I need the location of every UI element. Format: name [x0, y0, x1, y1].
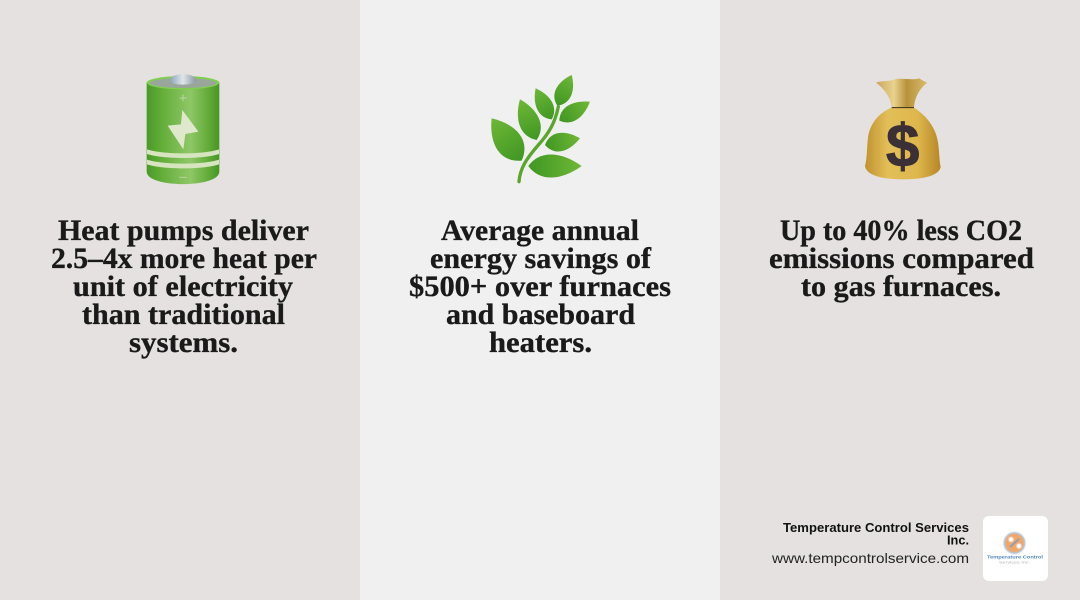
heading: savings — [409, 214, 671, 359]
heading: savings: $500+ over furnaces — [409, 270, 671, 303]
icon: money bag: $ — [886, 112, 919, 179]
heading: efficiency: 2.5–4x more heat per — [51, 242, 317, 275]
heading: efficiency: than traditional — [82, 298, 285, 331]
logo card: Temperature Control — [987, 554, 1043, 560]
icon: green leaves — [481, 71, 594, 182]
icon: money bag — [865, 78, 941, 179]
logo card: Services Inc. — [999, 560, 1030, 564]
heading: emissions — [769, 214, 1034, 303]
heading: savings: energy savings of — [430, 242, 652, 275]
logo card — [983, 516, 1048, 581]
website: www.tempcontrolservice.com — [771, 550, 969, 566]
heading: efficiency: systems. — [129, 326, 238, 359]
panel: efficiency — [0, 0, 360, 600]
panel: emissions — [720, 0, 1080, 600]
heading: savings: and baseboard — [446, 298, 635, 331]
heading: savings: Average annual — [441, 214, 639, 247]
icon: green battery — [147, 74, 219, 184]
heading: emissions: to gas furnaces. — [801, 270, 1001, 303]
heading: emissions: Up to 40% less CO2 — [780, 214, 1022, 247]
company name: Inc. — [947, 532, 969, 548]
heading: emissions: emissions compared — [769, 242, 1034, 275]
heading: efficiency: unit of electricity — [73, 270, 293, 303]
company name: Temperature Control Services — [783, 520, 969, 535]
heading: savings: heaters. — [489, 326, 592, 359]
heading: efficiency — [51, 214, 317, 359]
heading: efficiency: Heat pumps deliver — [58, 214, 309, 247]
panel: savings — [360, 0, 720, 600]
